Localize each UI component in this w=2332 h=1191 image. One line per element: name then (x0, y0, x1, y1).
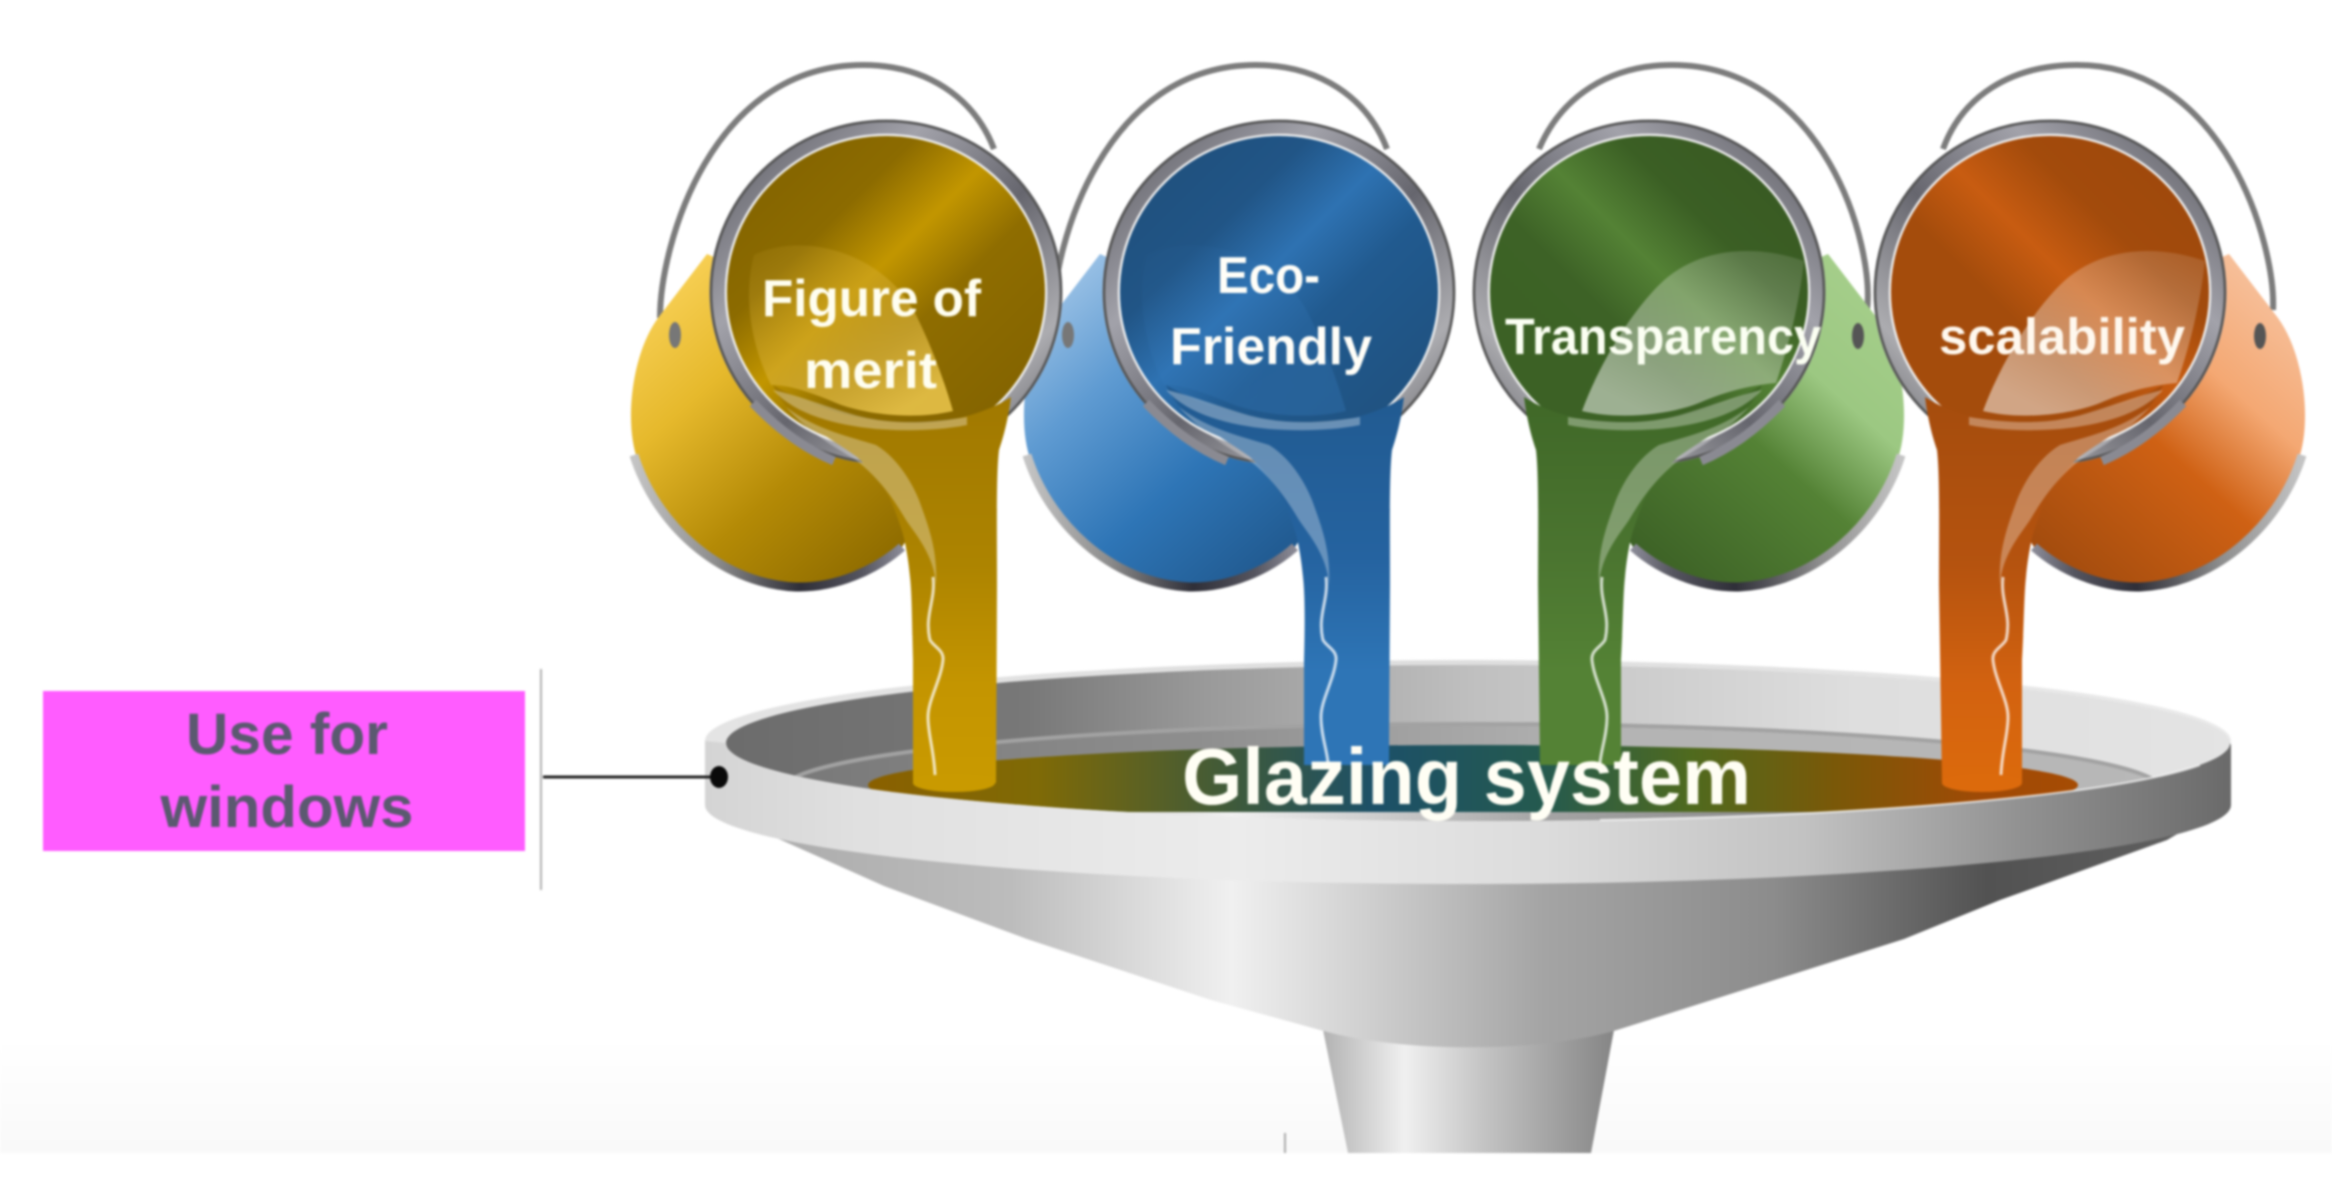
label: Figure of merit: Figure of (762, 270, 982, 328)
label: Eco-Friendly: Eco- (1217, 247, 1320, 305)
label: Figure of merit: merit (804, 342, 937, 400)
callout: Use for windows: windows (159, 775, 414, 840)
label: scalability: scalability (1939, 308, 2186, 365)
small tick near funnel neck (1284, 1133, 1286, 1153)
funnel interior (704, 659, 2231, 814)
label: Eco-Friendly (1170, 247, 1372, 376)
bucket: blue, Eco-Friendly (1024, 65, 1454, 765)
faint bottom background fade (0, 1040, 2332, 1153)
label: Eco-Friendly: Friendly (1170, 318, 1372, 376)
label: Transparency: Transparency (1505, 308, 1822, 365)
callout: Use for windows: Use for (186, 702, 388, 767)
bucket: gold, Figure of merit (631, 65, 1061, 792)
bucket: green, Transparency (1474, 65, 1904, 765)
callout: Use for windows (43, 691, 525, 851)
label: Figure of merit (762, 270, 982, 400)
funnel body: neck, cone and front band (705, 741, 2231, 1153)
title: Glazing system: Glazing system (1182, 732, 1751, 821)
connector line from callout to funnel (541, 669, 728, 890)
bucket: orange, scalability (1875, 65, 2305, 792)
